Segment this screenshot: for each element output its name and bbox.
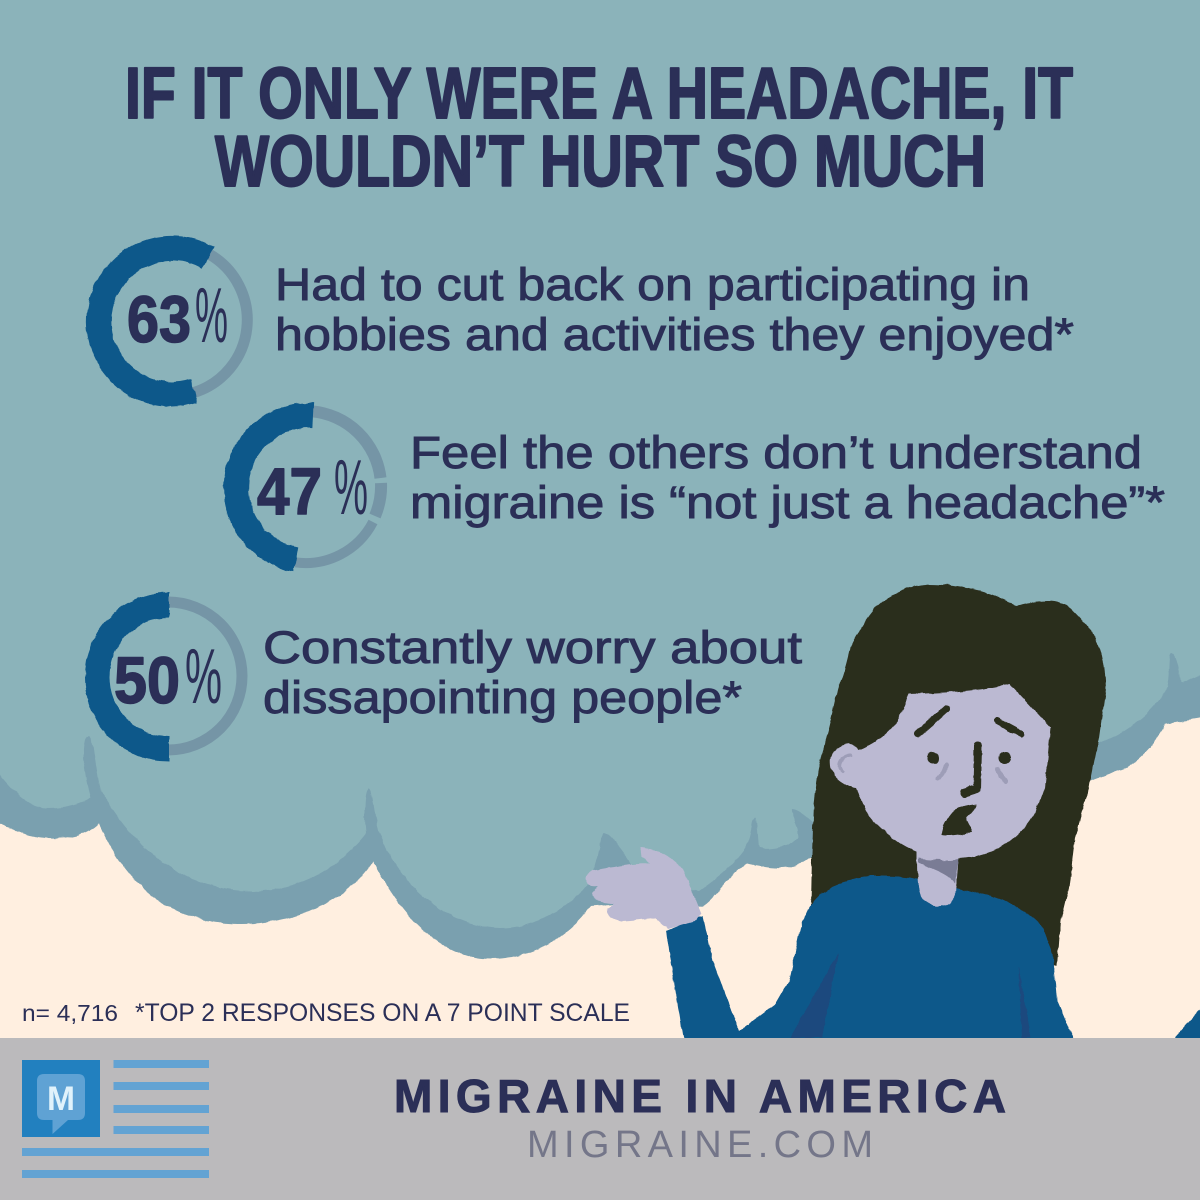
mouth bbox=[940, 803, 975, 835]
title: WOULDN’T HURT SO MUCH bbox=[215, 122, 986, 202]
ear detail bbox=[839, 754, 850, 771]
text: worry statistic bbox=[263, 622, 803, 723]
text: hobbies statistic bbox=[275, 259, 1074, 360]
text: worry statistic: Constantly worry about bbox=[263, 622, 803, 673]
footer band bbox=[0, 1038, 1200, 1200]
footer title: MIGRAINE IN AMERICA bbox=[394, 1070, 1006, 1122]
text: understanding statistic: Feel the others don’t understand bbox=[410, 427, 1142, 478]
sweater and raised arm bbox=[665, 875, 1074, 1042]
corner sleeve fragment bbox=[1169, 985, 1200, 1042]
neck shadow bbox=[918, 857, 958, 882]
cloud shadow edge bbox=[0, 0, 1200, 958]
footer url: MIGRAINE.COM bbox=[527, 1124, 873, 1166]
donut: 47% bbox=[235, 411, 381, 563]
donut: 63%: % bbox=[195, 271, 228, 359]
hair bbox=[810, 583, 1105, 965]
text: hobbies statistic: Had to cut back on participating in bbox=[275, 259, 1030, 310]
eyebrow left bbox=[917, 708, 945, 733]
footnote: n= 4,716 bbox=[22, 1000, 118, 1026]
eyes bbox=[926, 751, 1010, 763]
donut: 50% bbox=[96, 602, 242, 750]
logo: migraine.com flag: M bbox=[47, 1080, 75, 1118]
sleeve fold left bbox=[789, 952, 837, 1037]
eyebrow right bbox=[996, 720, 1020, 733]
hand bbox=[584, 847, 700, 928]
cloud main fill bbox=[0, 0, 1200, 927]
text: hobbies statistic: hobbies and activities they enjoyed* bbox=[275, 309, 1074, 360]
sleeve fold right bbox=[1017, 963, 1030, 1037]
under-eye marks bbox=[937, 764, 1004, 780]
nose bbox=[963, 745, 977, 792]
donut: 50%: 50 bbox=[114, 643, 180, 717]
title bbox=[125, 54, 1073, 202]
face and ear bbox=[829, 683, 1050, 858]
illustration: worried woman bbox=[584, 583, 1105, 1042]
text: understanding statistic: migraine is “not just a headache”* bbox=[410, 477, 1165, 528]
donut: 47%: % bbox=[334, 443, 368, 531]
text: worry statistic: dissapointing people* bbox=[263, 672, 742, 723]
footnote: *TOP 2 RESPONSES ON A 7 POINT SCALE bbox=[135, 999, 630, 1027]
neck bbox=[916, 850, 958, 905]
donut: 63%: 63 bbox=[127, 282, 191, 356]
donut: 50%: % bbox=[185, 632, 222, 720]
donut: 63% bbox=[98, 247, 247, 393]
donut: 47%: 47 bbox=[257, 454, 322, 528]
logo: migraine.com flag bbox=[22, 1060, 209, 1178]
text: understanding statistic bbox=[410, 427, 1165, 528]
